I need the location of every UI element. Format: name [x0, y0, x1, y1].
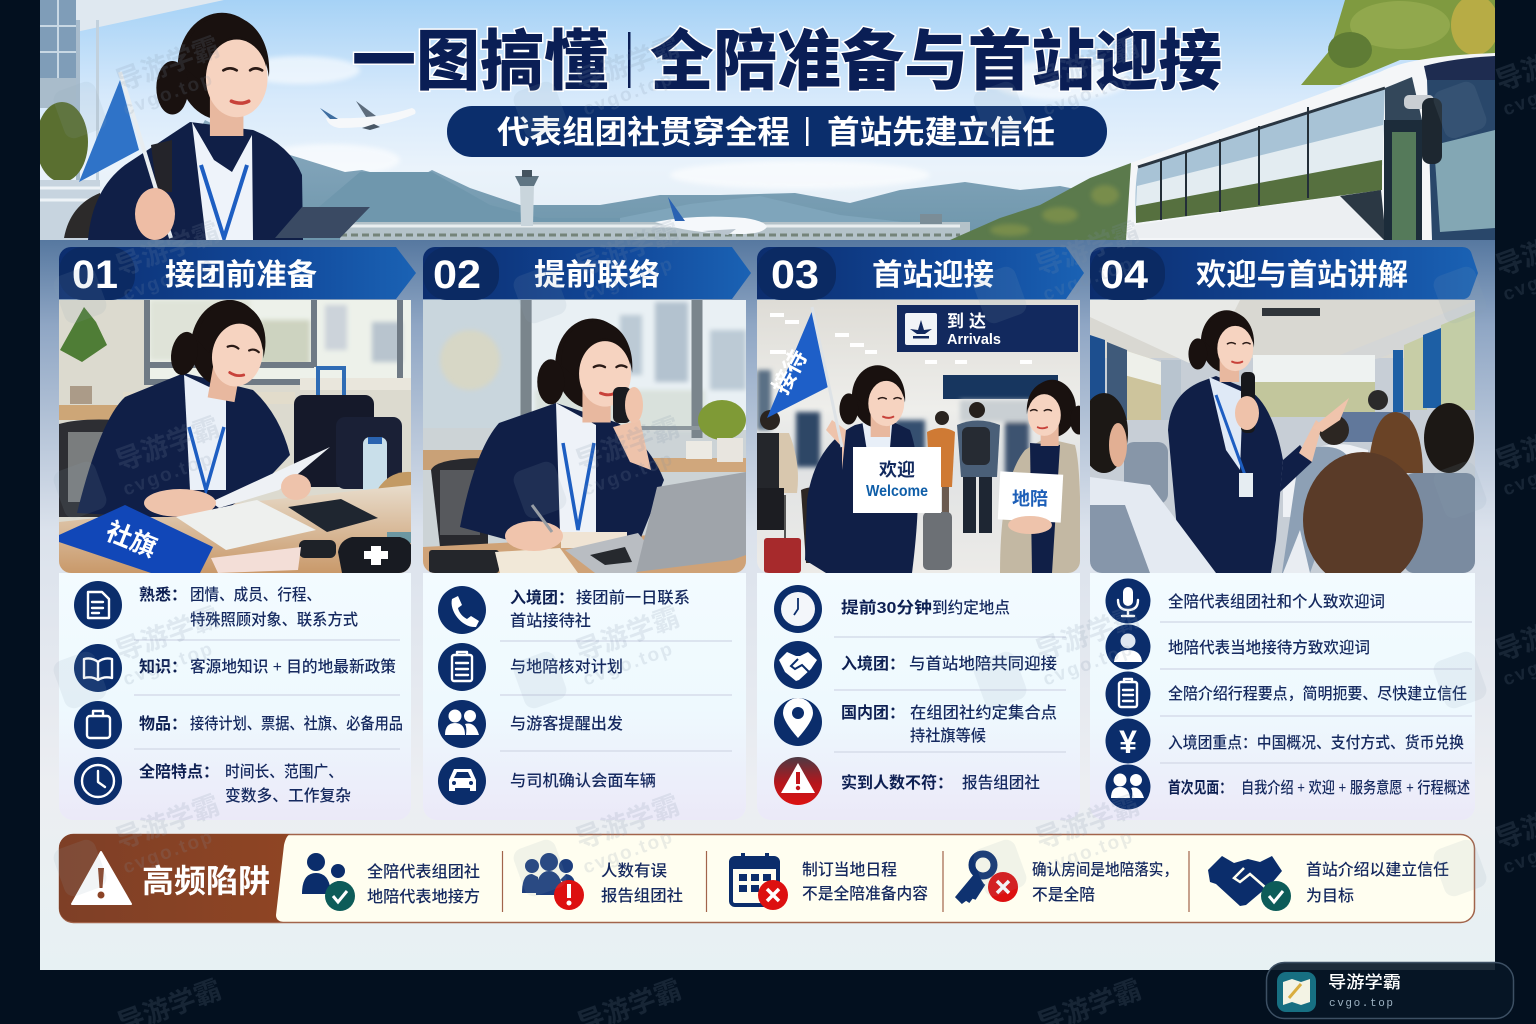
watermarks: 导游学霸 — [112, 217, 224, 282]
text: 实到人数不符 — [841, 773, 1040, 792]
watermarks: 导游学霸 — [1032, 32, 1144, 97]
flag — [79, 80, 139, 182]
text: 全陪特点: 变数多、工作复杂 — [225, 786, 351, 805]
text: 与游客提醒出发: 与游客提醒出发 — [510, 714, 623, 733]
header 03 — [757, 247, 1084, 300]
pitfall 2: 人数有误 — [601, 862, 667, 880]
text: 入境团 与首站地陪 — [841, 654, 1057, 673]
icon: wall clock — [774, 585, 822, 633]
watermarks: 导游学霸 — [1032, 790, 1144, 855]
watermarks: cvgo.top — [580, 68, 677, 120]
text: 全陪介绍行程要点: 全陪介绍行程要点，简明扼要、尽快建立信任 — [1168, 684, 1467, 703]
watermarks: 导游学霸 — [112, 790, 224, 855]
watermarks: cvgo.top — [1040, 638, 1137, 690]
text: 与司机确认会面车辆: 与司机确认会面车辆 — [510, 772, 656, 790]
text: 国内团: 在组团社约定集合点 — [910, 703, 1057, 722]
photo: guide studying documents at desk: 社旗 — [102, 516, 161, 563]
icon: map logo — [1277, 972, 1316, 1012]
icon: luggage — [74, 701, 122, 749]
text: 入境团: 入境团： — [510, 588, 574, 607]
trees top right — [1301, 0, 1499, 85]
brand badge: 导游学霸 — [1328, 972, 1401, 992]
text: 首次见面 — [1168, 778, 1470, 797]
header 01: 01 — [72, 253, 118, 297]
icon: microphone — [1106, 578, 1150, 624]
backpack — [64, 193, 100, 238]
info card — [757, 573, 1080, 820]
text: 熟悉: 团情、成员、行程、 — [190, 586, 321, 604]
text: 实到人数不符: 实到人数不符： — [841, 773, 953, 792]
header 02: 提前联络 — [534, 259, 660, 292]
icon: phone — [438, 586, 486, 634]
pitfalls heading — [59, 834, 290, 922]
info card — [59, 573, 411, 820]
pitfall 4 — [957, 854, 1178, 904]
icon: clipboard — [438, 643, 486, 691]
clouds — [240, 56, 1130, 189]
header 04: 04 — [1100, 253, 1149, 297]
icon: book — [74, 644, 122, 692]
crowd — [757, 370, 1040, 475]
text: 首次见面: 自我介绍 + 欢迎 + 服务意愿 + 行程概述 — [1241, 778, 1470, 797]
pitfall 2: 报告组团社 — [601, 887, 683, 905]
icon: warning — [774, 757, 822, 805]
text: 国内团 — [841, 703, 1057, 745]
desk — [423, 535, 746, 573]
pitfall 1: 地陪代表地接方 — [367, 887, 480, 906]
airport terminal strip — [340, 214, 970, 240]
title: 全陪准备与首站迎接 — [650, 24, 1222, 98]
plane in the sky — [320, 101, 416, 130]
text: 全陪致欢迎词: 全陪代表组团社和个人致欢迎词 — [1168, 592, 1385, 611]
passengers behind — [1124, 442, 1168, 504]
panel 4: 欢迎与首站讲解 — [1080, 247, 1478, 820]
pitfall 1: 全陪代表组团社 — [367, 862, 480, 881]
text: 入境团 与首站地陪: 与首站地陪共同迎接 — [909, 655, 1057, 673]
text: 国内团: 国内团： — [841, 704, 905, 722]
text: 入境团重点: 入境团重点：中国概况、支付方式、货币兑换 — [1168, 733, 1464, 752]
mountains — [203, 120, 1072, 240]
title: 一图搞懂 — [352, 24, 608, 98]
guide — [460, 403, 664, 540]
header 03: 03 — [771, 253, 819, 297]
pitfall 3: 不是全陪准备内容 — [802, 884, 928, 903]
departures board — [943, 375, 1058, 399]
arrivals sign — [897, 305, 1078, 352]
guide body — [88, 122, 303, 240]
pitfall 5 — [1208, 856, 1449, 911]
text: 提前30分钟: 到约定地点 — [932, 598, 1010, 617]
left guide with welcome sign: Welcome — [866, 483, 928, 500]
icon: handshake with check — [1208, 856, 1291, 911]
watermarks: cvgo.top — [580, 448, 677, 500]
brand badge — [1266, 962, 1514, 1018]
header 01: 接团前准备 — [165, 259, 317, 292]
header 03: 首站迎接 — [872, 259, 994, 292]
pitfall 1 — [302, 853, 480, 911]
watermarks: 导游学霸 — [112, 32, 224, 97]
watermarks: cvgo.top — [120, 68, 217, 120]
icon: yen: ¥ — [1119, 724, 1137, 760]
header 01 — [59, 247, 416, 300]
text: 物品: 物品： — [139, 715, 187, 733]
flag on desk — [59, 505, 213, 573]
watermarks: cvgo.top — [120, 253, 217, 305]
ceiling — [1090, 300, 1475, 358]
info card — [423, 573, 746, 820]
curtains — [1090, 335, 1105, 400]
icon: clock — [74, 757, 122, 805]
pitfall 2 — [522, 853, 683, 910]
icon: location pin — [774, 698, 822, 746]
watermarks: cvgo.top — [1040, 253, 1137, 305]
watermarks: 导游学霸 — [572, 790, 684, 855]
icon: key with cross — [957, 854, 1018, 902]
tour bus — [1126, 53, 1495, 240]
watermarks: 导游学霸 — [1032, 602, 1144, 667]
watermarks: cvgo.top — [1040, 68, 1137, 120]
hero banner — [36, 0, 1499, 240]
panel 3: 首站迎接 — [757, 247, 1087, 820]
header 02: 02 — [433, 253, 481, 297]
text: 熟悉 — [139, 585, 358, 629]
subtitle pill — [447, 106, 1107, 157]
hero sky — [40, 0, 1420, 205]
text: 提前30分钟: 提前30分钟 — [841, 598, 932, 617]
clipboard — [275, 207, 370, 238]
panel 1: 接团前准备 — [59, 247, 416, 820]
icon: yen — [1106, 718, 1150, 764]
panel 2: 提前联络 — [423, 247, 751, 820]
hand — [135, 188, 175, 240]
text: 知识: 客源地知识 + 目的地最新政策 — [190, 657, 396, 676]
header 02 — [423, 247, 751, 300]
icon: itinerary — [1106, 672, 1150, 716]
pitfall 4: 确认房间是地陪落实， — [1032, 860, 1178, 879]
icon: group — [1106, 764, 1150, 810]
pitfall 5: 首站介绍以建立信任 — [1306, 861, 1449, 879]
guide — [77, 373, 290, 517]
text: 全陪特点: 全陪特点： — [139, 762, 219, 781]
watermarks: cvgo.top — [1040, 826, 1137, 878]
text: 物品 — [139, 715, 403, 733]
watermarks: 导游学霸 — [1032, 217, 1144, 282]
watermarks: cvgo.top — [120, 448, 217, 500]
parked plane — [655, 197, 767, 235]
text: 熟悉: 特殊照顾对象、联系方式 — [190, 610, 358, 629]
watermarks: cvgo.top — [580, 638, 677, 690]
pitfalls heading: 高频陷阱 — [142, 863, 270, 899]
watermarks: 导游学霸 — [112, 602, 224, 667]
text: 熟悉: 熟悉： — [139, 585, 187, 604]
icon: local guide — [1106, 624, 1150, 670]
info card — [1090, 573, 1475, 820]
content sheet background — [40, 238, 1495, 970]
arrivals sign: Arrivals — [947, 331, 1001, 348]
icon: calendar with cross — [731, 853, 788, 910]
subtitle pill: 首站先建立信任 — [827, 114, 1055, 150]
text: 国内团: 持社旗等候 — [910, 727, 986, 745]
watermarks: cvgo.top — [580, 826, 677, 878]
pitfall 3 — [731, 853, 928, 910]
text: 与地陪核对计划: 与地陪核对计划 — [510, 658, 623, 676]
watermarks: 导游学霸 — [572, 32, 684, 97]
forested hill — [950, 163, 1131, 240]
right guide with 地陪 sign — [998, 380, 1087, 573]
watermarks: 导游学霸 — [572, 602, 684, 667]
pitfall 5: 为目标 — [1306, 887, 1354, 905]
left guide with welcome sign — [801, 365, 941, 573]
right guide with 地陪 sign: 地陪 — [1012, 489, 1048, 509]
rows of seats — [1340, 412, 1410, 442]
control tower — [515, 170, 539, 226]
left guide with welcome sign: 欢迎 — [879, 460, 915, 480]
arrivals sign: 到达 — [947, 312, 991, 331]
desk — [59, 485, 411, 573]
text: 全陪特点 — [139, 762, 351, 805]
icon: guides with check — [302, 853, 355, 911]
brand badge: cvgo.top — [1329, 998, 1393, 1010]
photo: guide studying documents at desk — [59, 291, 412, 573]
watermarks: 导游学霸 — [572, 217, 684, 282]
photo: guide on phone with laptop — [423, 300, 746, 573]
photo: airport arrivals welcome — [757, 300, 1087, 573]
text: 地陪致欢迎词: 地陪代表当地接待方致欢迎词 — [1168, 638, 1370, 657]
flag 接待: 接待 — [767, 346, 812, 398]
title — [352, 24, 1222, 98]
text: 入境团 — [510, 588, 690, 630]
text: 实到人数不符: 报告组团社 — [962, 774, 1040, 792]
watermarks: cvgo.top — [120, 826, 217, 878]
laptop — [565, 533, 644, 573]
luggage — [318, 368, 344, 398]
pitfalls bar — [59, 834, 1474, 922]
text: 入境团 与首站地陪: 入境团： — [841, 654, 905, 673]
speaking guide — [1168, 310, 1349, 573]
text: 入境团: 接团前一日联系 — [576, 589, 690, 607]
watermarks: cvgo.top — [580, 253, 677, 305]
icon: people — [438, 700, 486, 748]
text: 首次见面: 首次见面： — [1168, 778, 1232, 797]
watermarks: cvgo.top — [120, 638, 217, 690]
icon: document — [74, 581, 122, 629]
windows — [1124, 350, 1161, 420]
icon: handshake — [774, 641, 822, 689]
desk items — [561, 532, 627, 548]
photo: guide speaking on bus — [1080, 300, 1477, 588]
subtitle pill: 代表组团社贯穿全程 — [497, 114, 790, 150]
text: 全陪特点: 时间长、范围广、 — [225, 763, 343, 781]
header 04 — [1090, 247, 1478, 300]
text: 物品: 接待计划、票据、社旗、必备用品 — [190, 715, 403, 733]
text: 入境团: 首站接待社 — [510, 612, 591, 630]
passengers front — [1090, 477, 1216, 573]
text: 提前30分钟 — [841, 598, 1010, 617]
text: 知识: 知识： — [139, 657, 187, 676]
hero guide with flag — [64, 13, 370, 240]
pitfall 4: 不是全陪 — [1032, 885, 1095, 904]
terminal building left — [36, 0, 224, 240]
flag 接待 — [767, 307, 842, 447]
pitfall 3: 制订当地日程 — [802, 861, 897, 879]
header 04: 欢迎与首站讲解 — [1196, 259, 1408, 292]
icon: car — [438, 757, 486, 805]
icon: group with alert — [522, 853, 584, 910]
watermarks: 导游学霸 — [572, 412, 684, 477]
watermarks: 导游学霸 — [112, 412, 224, 477]
